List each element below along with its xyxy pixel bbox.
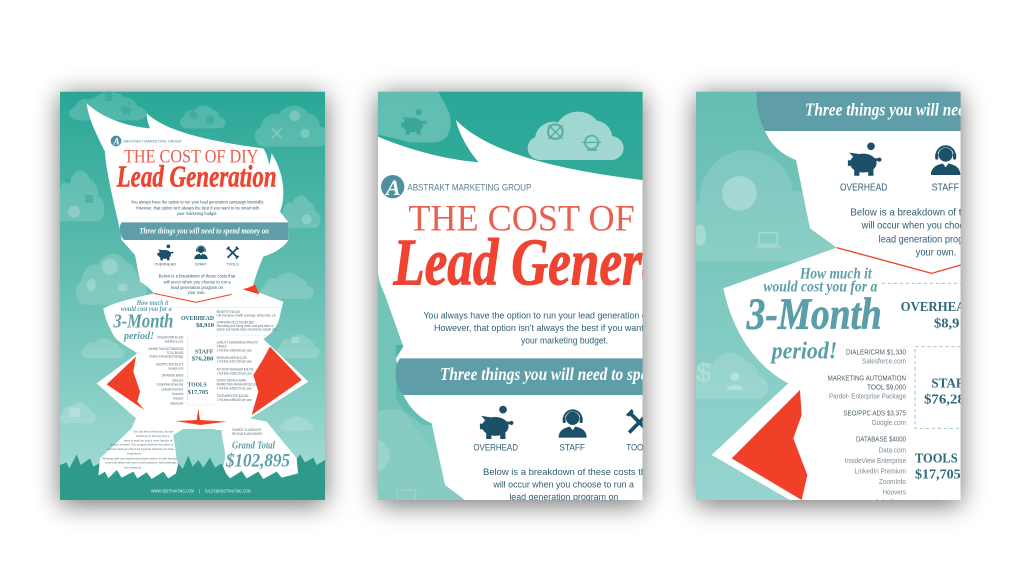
closing text: zero overhead cost. [124,465,142,469]
logo: A [384,175,401,200]
tools line items: DIALER/CRM $1,330 [157,336,184,340]
grand total [225,440,290,472]
icon labels: OVERHEAD [473,443,518,453]
icon: staff [931,146,960,175]
3-month heading: would cost you for a [763,279,878,296]
breakdown text: Below is a breakdown of these costs that [850,207,1024,218]
tools line items: DATABASE $4000 [162,374,184,378]
icon: tools [626,408,643,434]
icon labels: TOOLS [626,443,653,453]
closing text: lead-time. [127,451,142,455]
staff line items: Life insurance, health coverage, dental care, etc. [217,314,277,318]
tools line items: Salesforce.com [862,356,906,365]
logo: A [112,137,120,147]
intro text: However, that option isn't always the best if you want to be smart with [434,323,710,333]
icon labels: OVERHEAD [840,182,887,193]
source note: PAYSCALE AND INDEED [232,432,263,436]
icon labels: STAFF [932,182,959,193]
breakdown text: your own. [916,248,956,259]
cost totals: STAFF [931,375,972,390]
icon labels: STAFF [195,262,207,267]
banner [120,222,288,240]
closing text [102,430,177,469]
tools line items: LinkedIn Premium [855,466,906,475]
white silhouette [712,131,961,500]
3-month heading: period! [770,337,837,364]
grass back [60,454,325,500]
3-month heading: 3-Month [113,311,173,333]
3-month heading: How much it [136,299,169,307]
pale left background [378,272,422,440]
3-month heading: period! [123,330,154,342]
staff line items [217,310,277,402]
red axe head [732,390,807,500]
logo [381,175,531,200]
grand total: Grand Total [232,440,275,451]
panel: zoomed cost section [687,92,1024,506]
intro text: your marketing budget. [177,211,218,216]
cost totals: $17,705 [915,466,961,481]
title: Lead Generation [116,160,277,194]
logo: ABSTRAKT MARKETING GROUP [123,139,182,144]
cost totals: TOOLS [188,383,207,389]
tools line items [828,347,906,506]
breakdown text: will occur when you choose to run a [164,279,231,284]
tools line items: Pardot- Enterprise Package [829,392,906,401]
staff line items: SOCIAL MEDIA & EMAIL [217,379,247,383]
background clouds [378,92,451,142]
tools line items: Google.com [872,418,906,427]
teal gap between legs [177,430,225,469]
3-month heading: How much it [799,265,872,282]
staff line items: Recruiting and hiring costs, and jobs sites to [217,324,274,328]
tools line items: Pardot- Enterprise Package [149,355,184,359]
tools line items: ZoomInfo [172,392,184,396]
breakdown text: will occur when you choose to run a [861,221,1009,232]
cost totals: TOOLS [915,451,958,466]
banner heading: Three things you will need to spend money on [139,226,269,235]
staff line items: STAFFING $13,700 $4,500 [217,320,254,324]
logo: ABSTRAKT MARKETING GROUP [407,182,531,192]
cloud icons [401,109,601,150]
top banner [757,92,961,131]
cost totals [181,316,215,396]
white silhouette [378,120,643,500]
staff line items: 1 Full-time at $96,000 per year [217,398,252,402]
3-month heading: would cost you for a [121,305,172,313]
title [116,150,276,187]
tools line items: ZoomInfo [879,477,906,486]
shadows [60,95,961,505]
cloud icons [65,92,214,203]
tools line items: DIALER/CRM $1,330 [846,347,906,356]
icon: piggy bank [157,244,173,260]
staff line items: 1 Full-time at $54,900 per year [217,349,252,353]
tools line items: InsideView Enterprise [845,456,906,465]
icon: staff [194,246,208,259]
tools line items: TOOL $9,000 [867,383,906,392]
tools line items: MARKETING AUTOMATION [828,373,906,382]
title: THE COST OF DIY [124,146,258,167]
panel: full poster [54,92,329,500]
breakdown text: lead generation program on [879,234,992,245]
tools line items: Hoovers [173,397,184,401]
source note [232,428,262,435]
white silhouette [87,103,308,482]
tools line items: SalesGenie [875,497,906,506]
tools line items: TOOL $9,000 [167,351,184,355]
banner [396,358,643,395]
icon labels [473,443,653,453]
staff line items: TELEMARKETER $24,000 [217,394,249,398]
dashed boxes [882,283,961,428]
closing text: Working with our experienced staff means it's like having [102,456,177,460]
cost totals: $76,280 [192,356,213,363]
tools line items: Hoovers [883,487,906,496]
breakdown text [850,207,1024,259]
icon labels: STAFF [559,443,585,453]
tools line items [149,336,184,405]
title: THE COST OF DIY [408,199,708,240]
title [392,206,643,286]
cost totals: OVERHEAD [901,299,975,314]
footer [151,489,250,494]
staff line items: search and handle basic documents, payroll, etc. [217,328,277,332]
icon: piggy bank [848,142,881,176]
staff line items: RESEARCHER $10,230 [217,356,247,360]
cost totals: OVERHEAD [181,316,215,322]
source note: SOURCE: GLASSDOOR, [232,428,262,432]
staff line items: 1 Full-time at $65,070 per year [217,387,252,391]
panel: zoomed title section [378,92,750,502]
icon: staff [559,410,587,438]
intro text [424,312,643,346]
pale cloud background [696,150,837,262]
tools line items: Data.com [879,445,906,454]
closing text: doing it yourself. Our program delivers the perks of [110,442,173,446]
grass front [98,456,298,482]
icon labels: TOOLS [227,262,239,267]
staff line items: STAGES [217,345,227,349]
icon labels: OVERHEAD [154,262,176,267]
cloud icons [694,176,781,390]
icon: tools [226,246,239,259]
breakdown text: will occur when you choose to run a [492,480,635,490]
intro text [131,200,264,216]
cost totals: STAFF [195,350,214,356]
breakdown text [159,273,236,295]
footer: WWW.ABSTRAKTMG.COM [151,488,194,493]
tools line items: SEO/PPC ADS $3,375 [843,409,906,418]
intro text: your marketing budget. [521,336,608,346]
3-month heading [113,299,173,342]
tools line items: LinkedIn Premium [161,387,184,391]
breakdown text: lead generation program on [171,285,224,290]
cost totals: $8,910 [934,315,974,330]
cloud icons: $ [696,358,711,388]
grand total: $102,895 [225,451,290,472]
breakdown text: Below is a breakdown of these costs that [159,273,236,278]
tools line items: Google.com [168,367,184,371]
tools line items: SEO/PPC ADS $3,375 [156,363,184,367]
closing text: a low-cost talent team you in both practices, with potentially [105,461,177,465]
breakdown text [483,467,654,502]
icon labels [840,182,959,193]
staff line items: BENEFITS $4,620 [217,310,240,314]
cost totals: $8,910 [196,322,214,329]
intro text: You always have the option to run your lead generation campaign internally. [131,200,264,205]
tools line items: DATABASE $4000 [856,434,906,443]
tools line items: InsideView Enterprise [157,383,184,387]
banner heading: Three things you will need to spend money on [440,364,729,384]
closing text: team to work for only a mere fraction of [124,438,172,442]
logo [111,136,182,147]
closing text: benefit you in that you have a [136,434,170,438]
staff line items: 1 Full-time at $17,500 per year [217,360,252,364]
footer: | [199,488,200,493]
breakdown text: Below is a breakdown of these costs that [483,467,654,477]
tools line items: SalesGenie [170,401,184,405]
breakdown text: lead generation program on [509,492,618,502]
intro text: However, that option isn't always the best if you want to be smart with [136,205,260,210]
icon: piggy bank [480,406,513,439]
breakdown text: your own. [188,290,206,295]
cost totals: $17,705 [188,389,208,396]
tools line items: Salesforce.com [164,340,184,344]
staff line items: ACCOUNT MANAGER $18,780 [217,368,254,372]
cost totals: $76,280 [924,391,973,406]
footer: SALES@ABSTRAKTMG.COM [205,488,251,493]
icon labels [154,263,238,266]
title: Lead Generation [393,226,750,299]
background clouds [54,92,329,430]
staff line items: 1 Full-time at $56,140 per year [217,371,252,375]
red chevron [837,248,961,273]
tools line items: Data.com [172,378,184,382]
closing text: real-team lead gen without the expenses offered by the whole [107,447,174,451]
closing text: You can hire a third-party, but will [133,430,174,434]
cloud: dollar and person [687,353,768,399]
tools line items: MARKETING AUTOMATION [149,347,184,351]
staff line items: MARKETING MANAGER $21,340 [217,383,259,387]
cost totals [901,299,975,481]
staff line items: QUALITY ASSURANCE ANALYST [217,341,258,345]
intro text: You always have the option to run your lead generation campaign internally. [423,310,720,320]
dashed boxes [175,308,280,405]
3-month heading [746,265,882,364]
3-month heading: 3-Month [746,289,882,338]
red chevron and axe heads [107,284,302,425]
